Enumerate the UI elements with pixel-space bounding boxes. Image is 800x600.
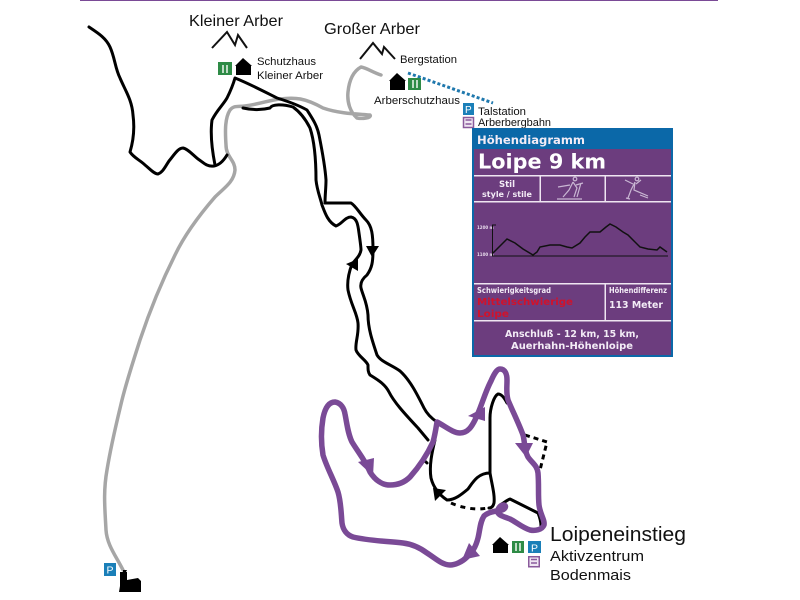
label: Schutzhaus Kleiner Arber: [257, 56, 323, 82]
difficulty row: Höhendifferenz: [609, 286, 667, 295]
arrow: black south: [366, 246, 379, 257]
difficulty row: Loipe: [477, 309, 509, 320]
label: Schutzhaus Kleiner Arber: Schutzhaus: [257, 56, 317, 68]
icon: restaurant Aktivzentrum: [512, 541, 524, 553]
icon: house Aktivzentrum: [492, 537, 509, 553]
icon: parking Aktivzentrum: [528, 541, 541, 554]
gray access trail from church to Kleiner Arber: [105, 67, 381, 570]
label: Talstation Arberbergbahn: Talstation: [478, 106, 526, 118]
icon: restaurant Schutzhaus Kleiner Arber: [218, 62, 232, 75]
connections text: Anschluß - 12 km, 15 km,: [505, 329, 639, 340]
icon: bus Talstation: [464, 118, 474, 128]
label: Talstation Arberbergbahn: Arberbergbahn: [478, 117, 551, 129]
connections text: Auerhahn-Höhenloipe: [511, 341, 633, 352]
panel heading: Höhendiagramm: [477, 133, 585, 147]
direction arrows: [346, 246, 533, 560]
difficulty row: Schwierigkeitsgrad: [477, 286, 551, 295]
elevation chart: [477, 224, 668, 257]
heading: Großer Arber: Großer Arber: [324, 21, 421, 38]
arrow: purple southwest: [462, 543, 480, 560]
label: Aktivzentrum Bodenmais: Aktivzentrum: [550, 549, 644, 565]
label: Aktivzentrum Bodenmais: [550, 549, 644, 584]
cable car dotted line: [408, 73, 493, 103]
elevation chart: 1200 m: [477, 225, 494, 230]
purple route: Loipe 9 km: [322, 369, 544, 565]
icon: classic skier: [557, 177, 583, 199]
label: Talstation Arberbergbahn: [478, 106, 551, 129]
black trail: inner loops: [430, 394, 541, 526]
icon: church: [119, 570, 141, 592]
black trail: west section to Kleiner Arber: [89, 27, 437, 440]
arrow: black north: [346, 259, 358, 271]
style row: style / stile: [482, 190, 533, 199]
icon: parking Talstation: P: [465, 105, 472, 116]
panel: Höhendiagramm: [472, 128, 673, 357]
difficulty row: Mittelschwierige: [477, 297, 573, 308]
icon: bus Aktivzentrum: [529, 557, 539, 567]
dashed trail sections: [426, 435, 547, 509]
icon: parking Aktivzentrum: P: [531, 542, 538, 554]
difficulty row: [474, 283, 671, 322]
connections text: [505, 329, 639, 352]
icon: house Schutzhaus Kleiner Arber: [235, 58, 252, 75]
icon: skating skier: [625, 177, 648, 199]
icon: restaurant Arberschutzhaus: [408, 78, 421, 90]
arrow: purple south: [515, 443, 533, 457]
heading: Kleiner Arber: Kleiner Arber: [189, 13, 284, 30]
icon: parking Talstation: [463, 103, 474, 116]
arrow: purple southeast: [358, 458, 374, 476]
label: Aktivzentrum Bodenmais: Bodenmais: [550, 568, 631, 584]
label: Schutzhaus Kleiner Arber: Kleiner Arber: [257, 70, 323, 82]
label: Arberschutzhaus: Arberschutzhaus: [374, 95, 461, 107]
elevation chart: 1100 m: [477, 252, 494, 257]
arrow: black northwest: [433, 488, 446, 501]
panel title: Loipe 9 km: [478, 150, 606, 174]
icon: parking church: [104, 563, 116, 576]
difficulty row: 113 Meter: [609, 300, 663, 311]
icon: Kleiner Arber mountain: [212, 32, 247, 48]
label: Bergstation: Bergstation: [400, 54, 457, 66]
icon: Großer Arber mountain: [360, 43, 395, 59]
style row: [474, 175, 671, 202]
icon: parking church: P: [106, 564, 114, 576]
style row: Stil: [499, 180, 515, 190]
arrow: purple north: [468, 407, 485, 421]
label: Loipeneinstieg: Loipeneinstieg: [550, 523, 686, 546]
icon: house Arberschutzhaus: [389, 73, 406, 90]
